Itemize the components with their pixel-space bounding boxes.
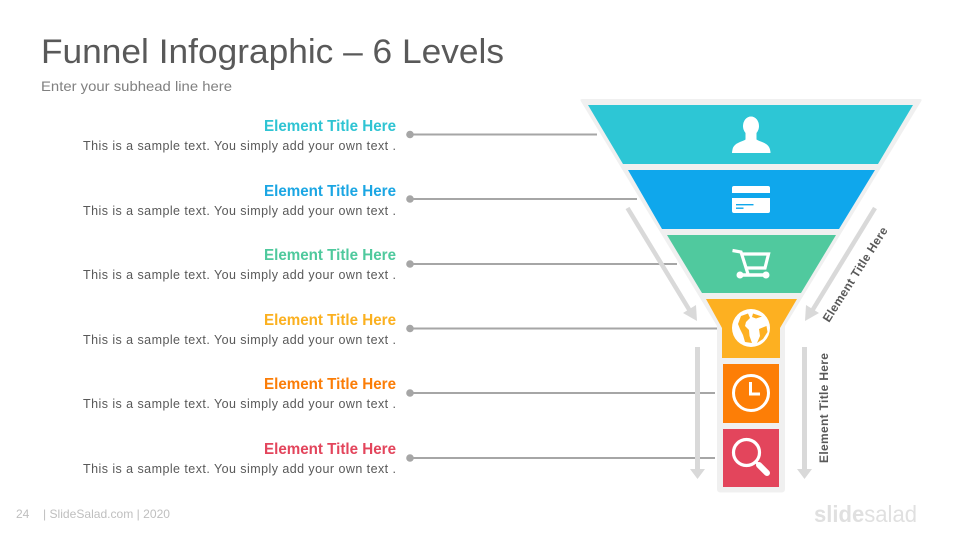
- text block: element 4: [83, 312, 396, 347]
- text block: element 2: Element Title Here: [264, 183, 396, 200]
- connector lines: [406, 131, 717, 462]
- icon: globe: [732, 309, 770, 347]
- arrow: right diagonal: [805, 208, 875, 321]
- logo: slidesalad: [814, 501, 917, 527]
- text block: element 2: This is a sample text. You simply add your own text .: [83, 204, 396, 218]
- funnel band 3: [667, 235, 836, 293]
- icon: magnifier: [734, 440, 767, 473]
- text block: element 3: This is a sample text. You simply add your own text .: [83, 268, 396, 282]
- icon: person: [732, 116, 770, 153]
- text block: element 4: This is a sample text. You simply add your own text .: [83, 333, 396, 347]
- text block: element 5: [83, 376, 396, 411]
- icon: shopping cart: [732, 250, 770, 278]
- rotated label: diagonal: Element Title Here: [820, 224, 891, 325]
- arrow: left vertical: [690, 347, 705, 479]
- text block: element 4: Element Title Here: [264, 312, 396, 329]
- title: Funnel Infographic – 6 Levels: [41, 33, 504, 71]
- text block: element 3: Element Title Here: [264, 247, 396, 264]
- funnel band 2: [628, 170, 875, 229]
- arrow: left diagonal: [628, 208, 697, 321]
- text block: element 1: Element Title Here: [264, 118, 396, 135]
- funnel backing shape: [580, 99, 922, 492]
- text block: element 5: Element Title Here: [264, 376, 396, 393]
- funnel band 5: [723, 364, 779, 423]
- icon: clock: [734, 376, 768, 410]
- icon: credit card: [732, 186, 770, 213]
- funnel band 4: [706, 299, 797, 358]
- text block: element 6: This is a sample text. You simply add your own text .: [83, 462, 396, 476]
- funnel band 1: [588, 105, 913, 164]
- text block: element 5: This is a sample text. You simply add your own text .: [83, 397, 396, 411]
- subhead: Enter your subhead line here: [41, 78, 232, 94]
- text block: element 6: Element Title Here: [264, 441, 396, 458]
- text block: element 3: [83, 247, 396, 282]
- rotated label: vertical: Element Title Here: [817, 353, 831, 463]
- footer page number: 24: [16, 507, 30, 521]
- text block: element 2: [83, 183, 396, 218]
- text block: element 6: [83, 441, 396, 476]
- arrow: right vertical: [797, 347, 812, 479]
- footer text: | SlideSalad.com | 2020: [43, 507, 170, 521]
- text block: element 1: This is a sample text. You simply add your own text .: [83, 139, 396, 153]
- text block: element 1: [83, 118, 396, 153]
- funnel band 6: [723, 429, 779, 487]
